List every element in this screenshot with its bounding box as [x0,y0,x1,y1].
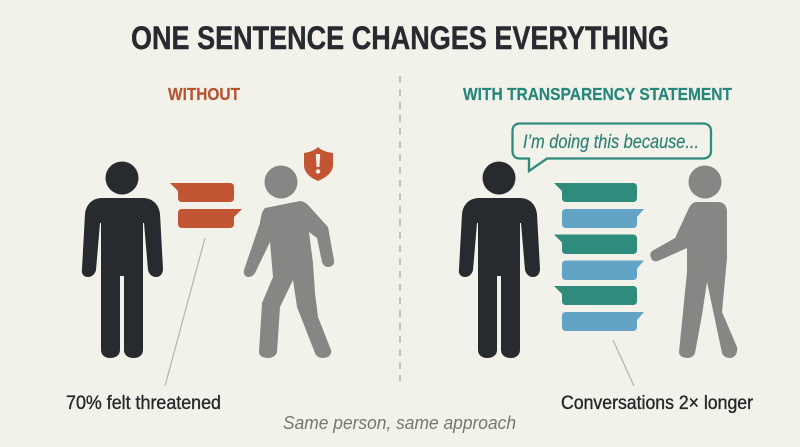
icon: grey walking-away person [244,166,334,358]
panel: without [66,147,334,414]
panel: with transparency statement [459,124,754,414]
stat: conversations 2x longer: Conversations 2× longer [561,393,754,414]
icon: warning shield [304,147,333,181]
icon: dark standing person [82,162,163,358]
leader line: threatened [165,238,205,386]
heading: with transparency statement: WITH TRANSPARENCY STATEMENT [463,84,732,104]
leader line: conversations [613,340,634,386]
caption: Same person, same approach [283,413,516,433]
speech bubbles: red exchange [170,183,242,228]
callout: I'm doing this because: I’m doing this because... [523,131,699,153]
callout: I'm doing this because [512,124,711,171]
title: ONE SENTENCE CHANGES EVERYTHING [131,20,669,56]
icon: dark standing person [459,162,540,358]
speech bubbles: teal and blue stack [554,183,644,331]
stat: 70% felt threatened: 70% felt threatened [66,393,221,414]
heading: without: WITHOUT [168,84,240,104]
icon: grey engaged person [650,166,737,358]
